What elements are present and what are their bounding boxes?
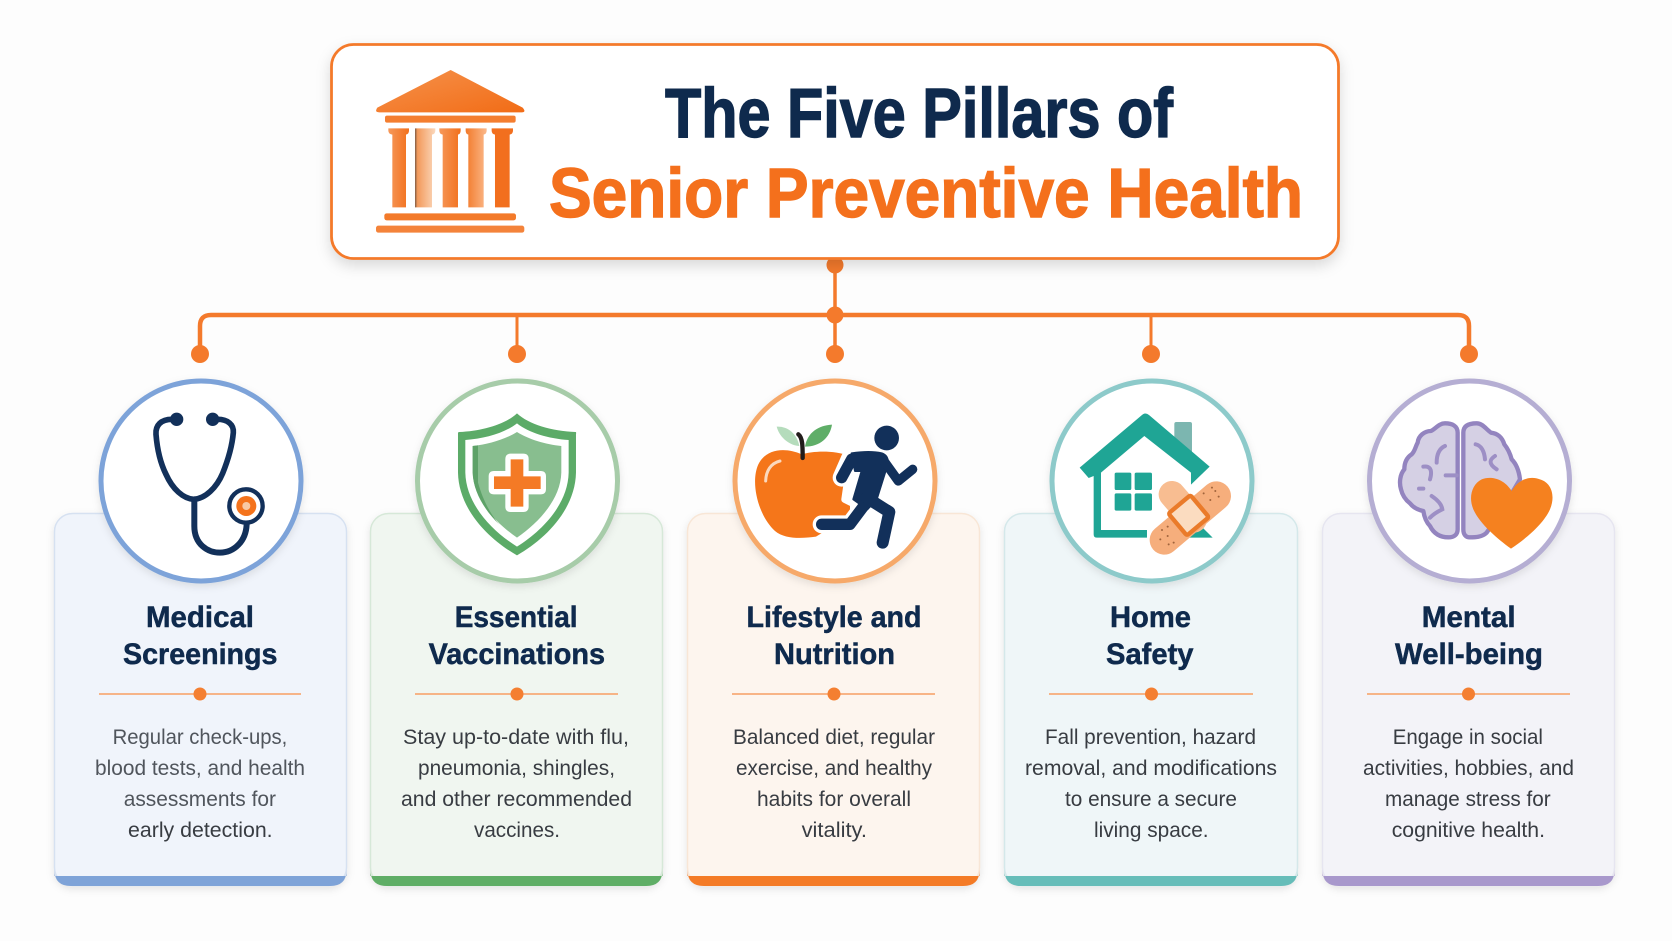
panel: medical screenings [54, 381, 346, 886]
description: Engage in social [1393, 725, 1543, 749]
divider [1049, 688, 1253, 700]
connector lines from title to pillars [191, 256, 1478, 363]
heading: Well-being [1395, 638, 1543, 671]
heading [123, 601, 278, 671]
description: Stay up-to-date with flu, [403, 725, 629, 749]
divider [1367, 688, 1570, 700]
panel: lifestyle and nutrition [688, 381, 980, 886]
heading: Medical [146, 601, 254, 634]
icon circle: shield with cross [418, 381, 618, 581]
icon circle: house and bandage [1052, 381, 1252, 581]
description: Balanced diet, regular [733, 725, 935, 749]
description: habits for overall [757, 787, 911, 811]
panel: mental well-being [1322, 381, 1614, 886]
description: blood tests, and health [95, 756, 305, 780]
panel: home safety [1004, 381, 1298, 886]
description: living space. [1094, 818, 1209, 842]
description: Fall prevention, hazard [1045, 725, 1256, 749]
heading: Vaccinations [429, 638, 605, 671]
heading [1106, 601, 1194, 671]
title line 1: The Five Pillars of [665, 74, 1174, 152]
divider [732, 688, 935, 700]
heading: Safety [1106, 638, 1194, 671]
icon circle: apple and runner [735, 381, 935, 581]
heading [429, 601, 605, 671]
description: vaccines. [474, 818, 560, 842]
divider [415, 688, 618, 700]
heading [746, 601, 922, 671]
description: assessments for [124, 787, 276, 811]
title line 2: Senior Preventive Health [549, 154, 1303, 232]
heading: Essential [455, 601, 578, 634]
heading: Mental [1422, 601, 1516, 634]
description: activities, hobbies, and [1363, 756, 1574, 780]
description [95, 725, 305, 842]
description [733, 725, 935, 842]
heading: Home [1110, 601, 1191, 634]
heading: Lifestyle and [746, 601, 922, 634]
description [1025, 725, 1277, 842]
description [401, 725, 632, 842]
divider [99, 688, 301, 700]
description: to ensure a secure [1065, 787, 1237, 811]
icon: classical pillars building [376, 70, 524, 233]
description: vitality. [802, 818, 867, 842]
description: removal, and modifications [1025, 756, 1277, 780]
heading: Screenings [123, 638, 278, 671]
description: early detection. [128, 818, 273, 842]
description: pneumonia, shingles, [418, 756, 615, 780]
panel: essential vaccinations [370, 381, 662, 886]
description: and other recommended [401, 787, 632, 811]
icon circle: stethoscope [101, 381, 301, 581]
heading: Nutrition [774, 638, 895, 671]
description [1363, 725, 1574, 842]
title panel [332, 44, 1338, 258]
description: manage stress for [1385, 787, 1551, 811]
icon circle: brain and heart [1370, 381, 1570, 581]
description: exercise, and healthy [736, 756, 932, 780]
description: Regular check-ups, [113, 725, 287, 749]
heading [1395, 601, 1543, 671]
description: cognitive health. [1392, 818, 1545, 842]
